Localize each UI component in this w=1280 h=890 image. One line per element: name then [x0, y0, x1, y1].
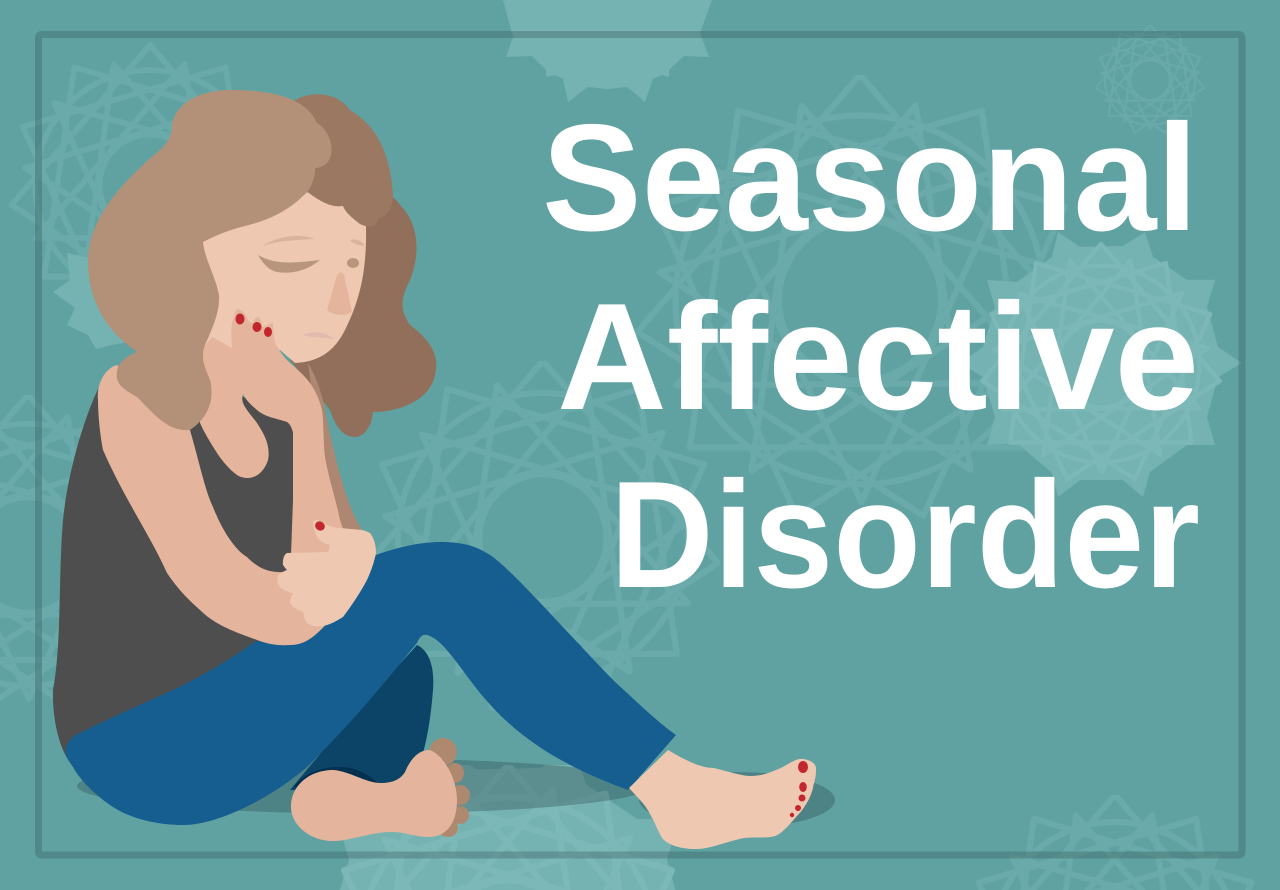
jeans — [65, 542, 676, 825]
far foot — [629, 750, 816, 849]
face — [190, 190, 366, 363]
background mandala centre — [366, 361, 720, 715]
neck, chest and raised forearm — [195, 309, 345, 555]
shoulder and front arm — [98, 365, 330, 645]
nail on knee hand — [313, 519, 327, 533]
background mandala behind title — [635, 75, 1085, 525]
title line: Seasonal: Seasonal — [542, 93, 1198, 263]
top hair — [290, 94, 393, 226]
foot nails — [790, 761, 808, 817]
closed eye — [258, 255, 320, 273]
left eyebrow — [262, 236, 315, 246]
background mandala top left — [0, 20, 310, 340]
woman figure — [53, 90, 816, 849]
right eye — [347, 258, 359, 268]
background mandala top right — [1095, 25, 1205, 135]
filled mandala right — [960, 232, 1242, 497]
title line: Disorder: Disorder — [610, 450, 1200, 620]
far arm — [308, 363, 362, 530]
dark lower leg — [290, 645, 433, 790]
nose — [327, 272, 352, 315]
hand on knee — [277, 520, 376, 626]
dark cuff arc — [293, 767, 380, 787]
right eyebrow — [350, 239, 365, 246]
background mandala bottom right — [965, 795, 1265, 890]
tank top — [53, 385, 295, 762]
filled mandala top — [503, 0, 712, 102]
floor shadow — [77, 758, 835, 828]
background mandala left — [0, 395, 190, 715]
red nails on cheek — [236, 314, 272, 337]
title — [542, 93, 1200, 620]
front hair — [88, 90, 332, 430]
near foot — [291, 750, 457, 841]
mouth — [303, 332, 334, 339]
title line: Affective: Affective — [557, 272, 1199, 442]
filled mandala left — [53, 240, 140, 349]
near foot toes — [429, 738, 470, 837]
back hair — [290, 190, 436, 437]
filled mandala bottom — [290, 765, 730, 890]
